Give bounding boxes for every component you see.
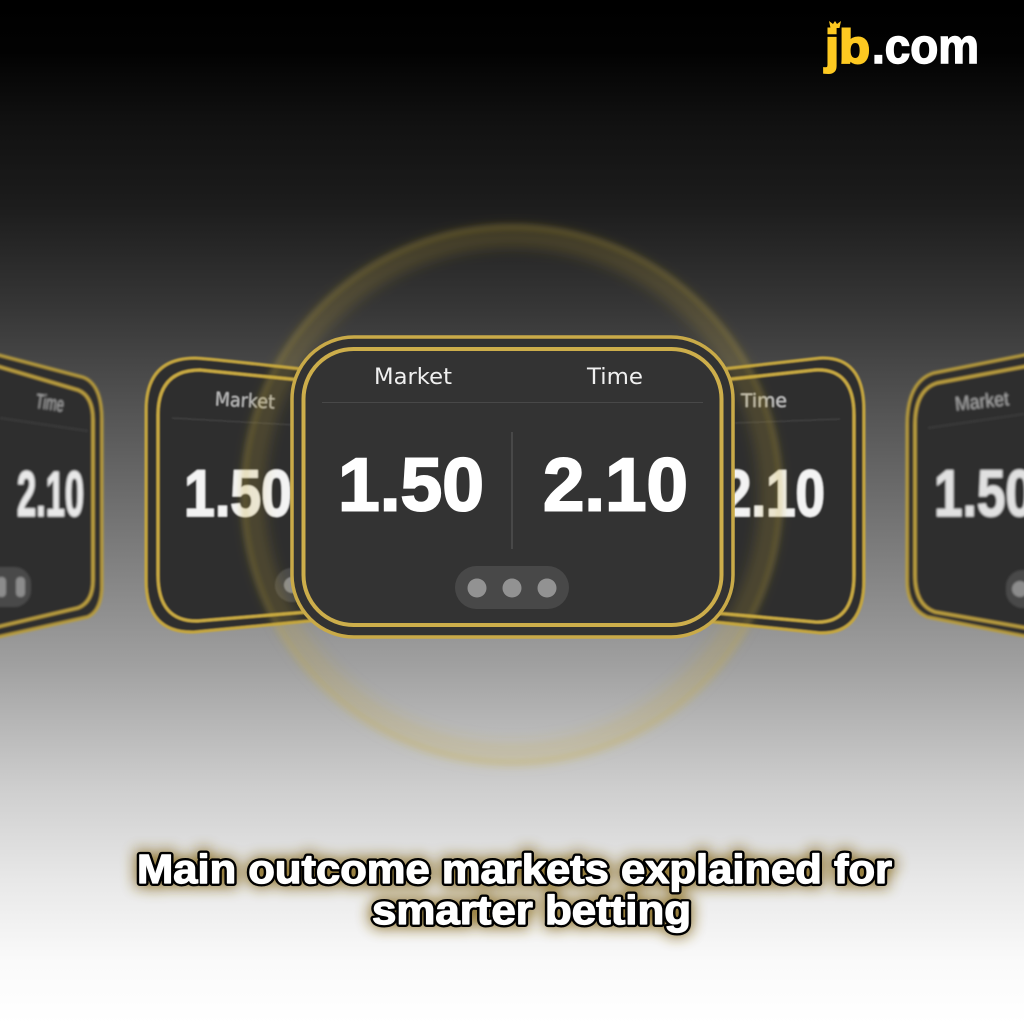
title line 2: smarter betting (372, 887, 691, 933)
left side card: Market (214, 388, 275, 414)
title glow: Main outcome markets explained for (137, 846, 892, 892)
card body with double gold border (292, 337, 733, 637)
odds value 2.10: 2.10 (543, 442, 688, 526)
left side card: 1.50 (184, 456, 292, 530)
title line 1: Main outcome markets explained for (137, 846, 892, 892)
right side card (704, 358, 864, 633)
logo: jb.com (824, 20, 979, 74)
header divider (322, 402, 703, 404)
column label: Market: Market (374, 365, 452, 390)
logo wordmark jb: jb (824, 20, 870, 73)
far left card (0, 350, 102, 641)
left side card (146, 358, 320, 632)
far right card: Market (954, 388, 1010, 416)
column label: Time: Time (586, 365, 643, 390)
logo wordmark .com: .com (872, 20, 979, 74)
center card (292, 337, 733, 637)
title (137, 846, 892, 933)
title glow (137, 846, 892, 933)
far right card (907, 351, 1024, 640)
far left card: Time (34, 390, 65, 417)
title line 2: smarter betting (372, 887, 691, 933)
pagination dots (455, 566, 569, 609)
odds value 1.50: 1.50 (338, 442, 484, 526)
glowing gold ring (244, 227, 780, 763)
column divider (511, 432, 513, 549)
title line 1: Main outcome markets explained for (137, 846, 892, 892)
title glow: smarter betting (372, 887, 691, 933)
right side card: Time (740, 390, 787, 412)
icon: crown (829, 21, 841, 28)
right side card: 2.10 (722, 456, 825, 530)
far left card: 2.10 (17, 458, 84, 530)
